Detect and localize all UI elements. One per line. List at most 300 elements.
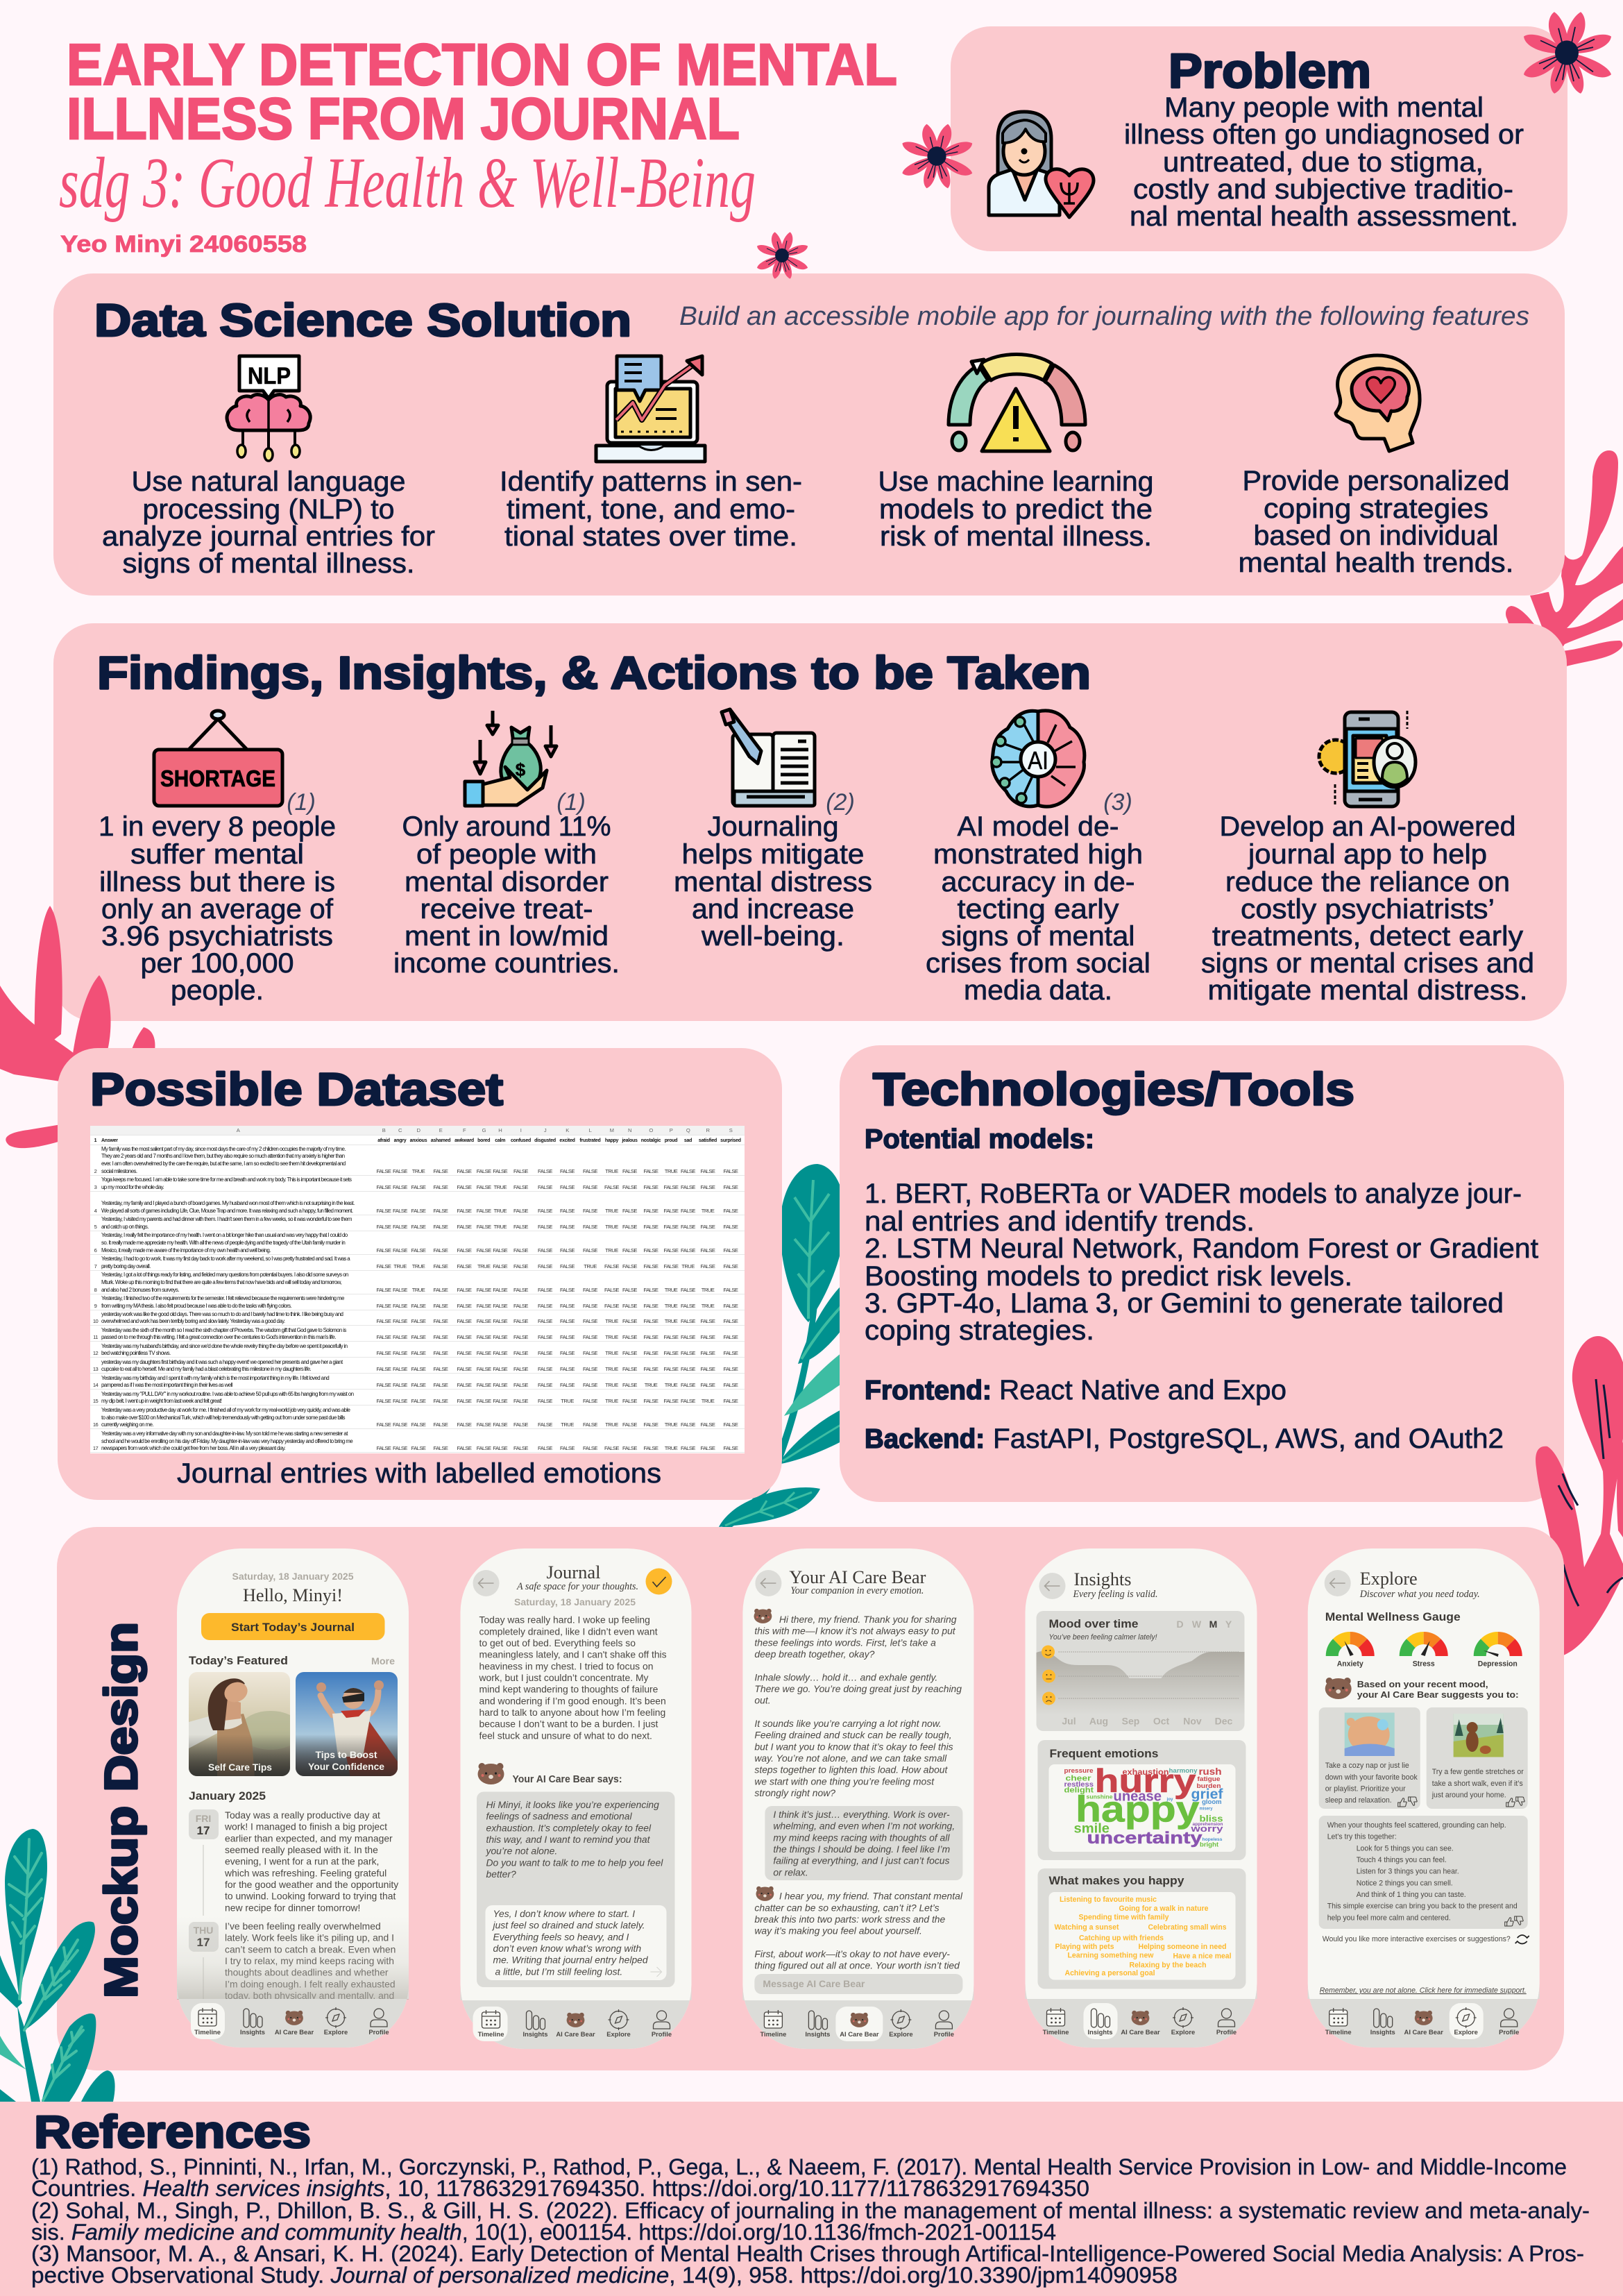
dataset table: FALSE (411, 1224, 425, 1230)
bear label: Your AI Care Bear says: (512, 1774, 622, 1785)
entry: friday: new recipe for dinner tomorrow! (225, 1902, 360, 1913)
dataset table: FALSE (583, 1421, 597, 1428)
nav bar: Explore (324, 2028, 348, 2036)
nav bar: Explore (1454, 2028, 1478, 2036)
icon: risk gauge with warning (949, 354, 1085, 451)
bear message: out. (754, 1695, 771, 1706)
heading: possible dataset: Possible Dataset (90, 1063, 503, 1115)
word cloud: frequent emotions: fatigue (1198, 1775, 1220, 1782)
dataset table: We played all sorts of games including Life, Clue, Mouse Trap and more. It was relaxing and such a happy, fun filled moment. (101, 1208, 352, 1214)
dataset table: FALSE (681, 1334, 695, 1340)
screen subtitle: Every feeling is valid. (1073, 1589, 1157, 1600)
icon: sentiment trends on laptop (596, 356, 705, 462)
user message (765, 1806, 962, 1880)
section heading: january: January 2025 (189, 1789, 266, 1803)
bear reply: First, about work—it’s okay to not have every- (754, 1948, 950, 1959)
chart: mood over time: You’ve been feeling calmer lately! (1049, 1633, 1157, 1641)
text: finding 2 (393, 811, 620, 979)
icon: NLP brain: NLP (248, 363, 291, 389)
chart: mood over time: Sep (1122, 1716, 1139, 1727)
text: finding 2: income countries. (393, 948, 620, 979)
list: what makes you happy: Helping someone in need (1138, 1943, 1227, 1951)
bear message: There we go. You’re doing great just by reaching (754, 1683, 962, 1694)
text: frontend (865, 1375, 1286, 1406)
card: nap suggestion: sleep and relaxation. (1325, 1796, 1392, 1805)
screen title: Your AI Care Bear (789, 1567, 926, 1587)
dataset table: Yesterday, I had to go to work. It was my first day back to work after my weekend, so I was pretty frustrated and sad. It was a (101, 1256, 350, 1262)
dataset table: FALSE (477, 1224, 491, 1230)
word cloud: frequent emotions: restless (1064, 1781, 1094, 1789)
entry: friday: FRI (196, 1813, 211, 1824)
text: finding 1 (99, 811, 336, 1006)
text: finding 1: people. (171, 975, 264, 1006)
bear message: we start with one thing you’re feeling most (754, 1775, 935, 1787)
dataset table: 7 (94, 1263, 96, 1269)
text: solution feature 2: timent, tone, and emo- (507, 494, 795, 525)
entry: friday: evening, I went for a run at the park, (225, 1856, 379, 1867)
text: reference 3: (3) Mansoor, M. A., & Ansari, K. H. (2024). Early Detection of Mental Health Crises through Artifical-Intelligence-Powered Social Media Analysis: A Pros- (31, 2241, 1584, 2266)
title: ILLNESS FROM JOURNAL (67, 86, 740, 151)
dataset table: FALSE (583, 1247, 597, 1253)
dataset table: and catch up on things. (101, 1224, 148, 1230)
section heading: gauge: Mental Wellness Gauge (1325, 1610, 1461, 1623)
dataset table: FALSE (622, 1224, 637, 1230)
dataset table: FALSE (622, 1445, 637, 1451)
dataset table: proud (665, 1138, 677, 1143)
text: reference 2 (31, 2198, 1590, 2245)
dataset table: FALSE (583, 1303, 597, 1309)
text: finding 3: well-being. (701, 921, 844, 952)
dataset table: newspapers from work which she could get free from her boss. All in all a very pleasant day. (101, 1445, 285, 1451)
dataset table: FALSE (457, 1398, 471, 1404)
chat box: feelings of sadness and emotional (486, 1811, 632, 1822)
panel: mockup design (57, 1527, 1564, 2070)
dataset table: TRUE (494, 1184, 507, 1190)
dataset table: FALSE (538, 1247, 552, 1253)
dataset table: FALSE (393, 1382, 407, 1388)
dataset table: FALSE (457, 1421, 471, 1428)
text: finding 4 (926, 811, 1150, 1006)
dataset table: FALSE (493, 1445, 507, 1451)
dataset table: FALSE (724, 1224, 738, 1230)
dataset table: FALSE (560, 1208, 575, 1214)
dataset table: FALSE (434, 1445, 448, 1451)
text: problem statement: Many people with mental (1164, 92, 1484, 123)
icon: head with heart in brain (1336, 355, 1420, 451)
dataset table: B (382, 1127, 385, 1133)
dataset table: FALSE (583, 1287, 597, 1293)
word cloud: frequent emotions: worry (1190, 1823, 1223, 1834)
text: reference 1: Countries. Health services insights , 10, 1178632917694350. https://doi.org/10.1177/1178632917694350 (31, 2176, 1089, 2201)
text: action: reduce the reliance on (1225, 867, 1510, 897)
dataset table: FALSE (701, 1184, 715, 1190)
dataset table: FALSE (434, 1366, 448, 1372)
word cloud: frequent emotions: gloom (1202, 1798, 1222, 1805)
dataset table: FALSE (681, 1303, 695, 1309)
dataset table: sad (684, 1138, 692, 1143)
dataset table: Yesterday, I finished two of the requirements for the semester. I felt relieved because the requirements were hindering me (101, 1295, 344, 1301)
dataset table: TRUE (393, 1263, 407, 1269)
chart: mood over time: Aug (1089, 1716, 1108, 1727)
dataset table: FALSE (457, 1366, 471, 1372)
phone: explore screen (1308, 1548, 1540, 2048)
dataset table: TRUE (665, 1287, 677, 1293)
dataset table: FALSE (644, 1334, 658, 1340)
card: grounding exercise (1319, 1816, 1528, 1929)
panel: references (0, 2102, 1623, 2296)
decoration: pink plant bottom right (1536, 1336, 1623, 1655)
dataset table: FALSE (560, 1445, 575, 1451)
dataset table: TRUE (494, 1208, 507, 1214)
dataset table: TRUE (494, 1224, 507, 1230)
dataset table: FALSE (583, 1382, 597, 1388)
dataset table: FALSE (513, 1421, 528, 1428)
suggestion heading (1357, 1679, 1519, 1700)
dataset table: FALSE (644, 1263, 658, 1269)
journal entry: work, but I just couldn’t concentrate. My (479, 1672, 649, 1683)
text: potential models: nal entries and identify trends. (865, 1206, 1255, 1237)
dataset table: 15 (93, 1398, 98, 1404)
text: solution feature 3: risk of mental illness. (880, 521, 1152, 552)
card: tips to boost confidence (296, 1672, 399, 1778)
dataset table: FALSE (377, 1382, 391, 1388)
text: reference 1 (31, 2154, 1567, 2201)
icon: AI brain: AI (1028, 746, 1048, 775)
text: action: signs or mental crises and (1201, 948, 1534, 979)
list: what makes you happy: Achieving a personal goal (1064, 1969, 1155, 1977)
text: problem statement (1124, 92, 1524, 232)
list: what makes you happy: Spending time with family (1078, 1914, 1169, 1922)
title (67, 32, 897, 151)
subtitle: sdg 3: sdg 3: Good Health & Well-Being (59, 143, 756, 223)
dataset table: FALSE (701, 1224, 715, 1230)
dataset table: FALSE (393, 1334, 407, 1340)
dataset table: 2 (94, 1168, 96, 1174)
dataset table: school and he would be enrolling on his day off Friday. My daughter-in-law was very happy yesterday and offered to bring me (101, 1438, 352, 1444)
dataset table: F (463, 1127, 466, 1133)
dataset table: FALSE (477, 1303, 491, 1309)
dataset table: FALSE (724, 1398, 738, 1404)
text: finding 2: Only around 11% (402, 811, 611, 842)
dataset table: FALSE (583, 1224, 597, 1230)
dataset table: cupcake to eat all to herself. Me and my family had a blast celebrating this milestone in my daughters life. (101, 1366, 311, 1372)
user message: or relax. (773, 1866, 808, 1877)
text: finding 2: receive treat- (420, 894, 593, 925)
phone: journal screen (461, 1548, 691, 2049)
nav bar: AI Care Bear (1404, 2028, 1443, 2036)
dataset table: FALSE (538, 1350, 552, 1356)
dataset table: FALSE (393, 1398, 407, 1404)
dataset table: FALSE (724, 1287, 738, 1293)
text: backend: FastAPI, PostgreSQL, AWS, and OAuth2 (993, 1424, 1504, 1454)
dataset table: FALSE (393, 1366, 407, 1372)
text: backend: Backend: (865, 1424, 985, 1454)
flower: centre (757, 232, 808, 279)
dataset table: FALSE (583, 1398, 597, 1404)
dataset table: disgusted (534, 1138, 556, 1143)
dataset table: 14 (93, 1382, 98, 1388)
text: solution feature 1: analyze journal entries for (102, 521, 435, 552)
text: action (1201, 811, 1534, 1006)
chat box: Everything feels so heavy, and I (493, 1931, 629, 1942)
text: finding 3 (674, 811, 872, 952)
dataset table: FALSE (681, 1445, 695, 1451)
bear message: but I want you to know that it’s okay to feel this (754, 1741, 953, 1752)
dataset table: O (649, 1127, 653, 1133)
card: self care tips: Self Care Tips (208, 1762, 272, 1773)
card: grounding exercise: Notice 2 things you can smell. (1357, 1879, 1453, 1887)
word cloud: frequent emotions: hopeless (1202, 1838, 1223, 1842)
text: frontend: React Native and Expo (999, 1375, 1286, 1406)
list: what makes you happy: Catching up with friends (1079, 1934, 1164, 1943)
dataset table: FALSE (644, 1224, 658, 1230)
dataset table: FALSE (477, 1184, 491, 1190)
dataset table: TRUE (605, 1168, 618, 1174)
dataset table: FALSE (560, 1263, 575, 1269)
chat box: exhaustion. It’s completely okay to feel (486, 1822, 652, 1833)
dataset table: FALSE (457, 1168, 471, 1174)
dataset table: social milestones. (101, 1168, 137, 1174)
dataset table: FALSE (701, 1263, 715, 1269)
text: finding 4: accuracy in de- (941, 867, 1135, 897)
phone: timeline screen (177, 1548, 409, 2048)
gauge: anxiety (1326, 1632, 1375, 1669)
dataset table: FALSE (377, 1334, 391, 1340)
icon: bear (477, 1763, 504, 1784)
dataset table: FALSE (604, 1184, 619, 1190)
dataset table: TRUE (645, 1382, 657, 1388)
text: finding 4: tecting early (958, 894, 1119, 925)
button: start journal (201, 1613, 384, 1640)
text: potential models: 2. LSTM Neural Network, Random Forest or Gradient (865, 1233, 1538, 1264)
dataset table: FALSE (583, 1366, 597, 1372)
text: problem statement: illness often go undiagnosed or (1124, 119, 1524, 150)
dataset table: FALSE (644, 1421, 658, 1428)
dataset table: FALSE (622, 1318, 637, 1324)
text: solution feature 1: processing (NLP) to (143, 494, 394, 525)
dataset table: FALSE (701, 1445, 715, 1451)
dataset table: FALSE (513, 1318, 528, 1324)
dataset table: FALSE (538, 1366, 552, 1372)
word cloud: frequent emotions: harmony (1169, 1767, 1198, 1774)
dataset table: FALSE (377, 1208, 391, 1214)
dataset table: FALSE (622, 1168, 637, 1174)
entry: friday: 17 (197, 1824, 210, 1837)
dataset table: FALSE (411, 1184, 425, 1190)
word cloud: frequent emotions: joy (1166, 1798, 1173, 1802)
dataset table: FALSE (701, 1350, 715, 1356)
dataset table: FALSE (681, 1398, 695, 1404)
dataset table: FALSE (701, 1318, 715, 1324)
dataset table: satisfied (699, 1138, 717, 1143)
list: what makes you happy: Going for a walk in nature (1119, 1905, 1209, 1913)
card: tips to boost confidence: Tips to Boost (315, 1749, 377, 1760)
bear reply: thing figured out all at once. Your worth isn’t tied (754, 1960, 960, 1971)
text: action: mitigate mental distress. (1207, 975, 1528, 1006)
suggestion heading: your AI Care Bear suggests you to: (1357, 1689, 1519, 1700)
journal entry: and wondering if I’m good enough. It’s been (479, 1695, 666, 1706)
dataset table: E (439, 1127, 442, 1133)
dataset table: 3 (94, 1184, 96, 1190)
user message: failing at everything, and I just can’t focus (773, 1855, 949, 1866)
dataset table: FALSE (644, 1398, 658, 1404)
bear message: Inhale slowly… hold it… and exhale gently. (754, 1671, 937, 1682)
chat box: you’re not alone. (486, 1846, 557, 1857)
text: solution feature 4: coping strategies (1264, 493, 1488, 524)
screen title: Explore (1360, 1569, 1418, 1589)
dataset table: G (482, 1127, 486, 1133)
dataset table: FALSE (377, 1184, 391, 1190)
phone: AI care bear screen (742, 1548, 974, 2049)
dataset table: bored (477, 1138, 490, 1143)
dataset table: FALSE (538, 1334, 552, 1340)
card: tips to boost confidence: Your Confidence (308, 1761, 384, 1772)
dataset table: Mexico, it really made me aware of the importance of my own health and well being. (101, 1247, 271, 1253)
dataset table: 1 (94, 1138, 96, 1143)
word cloud: frequent emotions: bright (1200, 1841, 1218, 1848)
dataset table: FALSE (513, 1445, 528, 1451)
dataset table: FALSE (434, 1398, 448, 1404)
text: reference 3 (31, 2241, 1584, 2288)
dataset table: TRUE (605, 1208, 618, 1214)
dataset table: FALSE (622, 1247, 637, 1253)
gauge: anxiety: Anxiety (1337, 1660, 1364, 1669)
dataset table: FALSE (538, 1421, 552, 1428)
dataset table: FALSE (604, 1263, 619, 1269)
entry: friday: which was refreshing. Feeling grateful (224, 1867, 386, 1878)
dataset table: 12 (93, 1350, 98, 1356)
entry: thursday: I’m doing enough. I felt really exhausted (225, 1978, 396, 1989)
dataset table: FALSE (434, 1263, 448, 1269)
nav bar: AI Care Bear (556, 2030, 595, 2038)
dataset table: FALSE (622, 1184, 637, 1190)
text: solution tagline: Build an accessible mobile app for journaling with the following features (679, 302, 1529, 331)
dataset table: FALSE (477, 1168, 491, 1174)
card: grounding exercise: And think of 1 thing you can taste. (1357, 1891, 1466, 1899)
card: stretch suggestion: Try a few gentle stretches or (1432, 1768, 1524, 1776)
dataset table: TRUE (605, 1334, 618, 1340)
dataset table: FALSE (583, 1445, 597, 1451)
nav bar: Insights (523, 2030, 547, 2038)
screen title: Journal (547, 1562, 601, 1582)
dataset table: FALSE (513, 1247, 528, 1253)
journal entry: because I don’t want to be a burden. I just (479, 1719, 658, 1730)
dataset table: TRUE (412, 1168, 425, 1174)
dataset table: FALSE (538, 1184, 552, 1190)
text: finding 2: ment in low/mid (405, 921, 609, 952)
dataset table: FALSE (724, 1184, 738, 1190)
text: finding 3: and increase (692, 894, 854, 925)
dataset table: FALSE (411, 1303, 425, 1309)
citation (1): (1) (287, 789, 316, 816)
dataset table: FALSE (664, 1208, 678, 1214)
nav bar (1026, 1984, 1257, 2048)
dataset table: FALSE (434, 1382, 448, 1388)
nav bar: Insights (1370, 2028, 1395, 2036)
dataset table: FALSE (724, 1318, 738, 1324)
dataset table: A (237, 1127, 239, 1133)
panel: technologies (840, 1045, 1564, 1502)
word cloud: frequent emotions: delight (1064, 1787, 1094, 1795)
message input: Message AI Care Bear (763, 1978, 865, 1989)
text: action: treatments, detect early (1212, 921, 1523, 952)
dataset table: FALSE (434, 1303, 448, 1309)
dataset table: FALSE (644, 1350, 658, 1356)
word cloud: frequent emotions: misery (1199, 1807, 1213, 1812)
dataset table: TRUE (605, 1318, 618, 1324)
chat box: Do you want to talk to me to help you feel (486, 1857, 663, 1868)
dataset table: FALSE (493, 1287, 507, 1293)
dataset table: FALSE (622, 1382, 637, 1388)
journal entry: to get out of bed. Everything feels so (479, 1637, 636, 1648)
icon: AI brain (992, 711, 1085, 807)
dataset table: excited (559, 1138, 575, 1143)
dataset table: calm (495, 1138, 505, 1143)
dataset table: FALSE (560, 1318, 575, 1324)
nav bar: Profile (1216, 2028, 1237, 2036)
dataset table: FALSE (604, 1303, 619, 1309)
dataset table: FALSE (393, 1287, 407, 1293)
text: frontend: Frontend: (865, 1376, 992, 1406)
dataset table: FALSE (411, 1208, 425, 1214)
screen subtitle: Your companion in every emotion. (790, 1585, 924, 1596)
dataset table: FALSE (664, 1334, 678, 1340)
bear reply: way it’s making you feel about yourself. (754, 1925, 922, 1936)
back button (1039, 1573, 1066, 1599)
panel: findings (53, 623, 1567, 1021)
text: finding 1: 3.96 psychiatrists (101, 921, 333, 952)
icon: NLP brain (227, 356, 310, 461)
text: potential models: 1. BERT, RoBERTa or VADER models to analyze jour- (865, 1179, 1522, 1209)
dataset table: D (417, 1127, 420, 1133)
dataset table: FALSE (560, 1184, 575, 1190)
chart: mood over time: Nov (1183, 1716, 1202, 1727)
dataset table: Yesterday was a very productive day at work for me. I finished all of my work for my real-world job very quickly, and was able (101, 1407, 350, 1413)
dataset table: FALSE (664, 1184, 678, 1190)
nav bar: Timeline (1325, 2028, 1352, 2036)
card: stretch suggestion (1427, 1707, 1528, 1809)
icon: money in hand with falling arrows (465, 711, 556, 806)
chart: mood over time: Dec (1215, 1716, 1233, 1727)
heading: technologies: Technologies/Tools (873, 1063, 1354, 1115)
dataset table: FALSE (538, 1303, 552, 1309)
entry: thursday: thoughts about deadlines and whether (225, 1967, 389, 1978)
text: solution feature 3 (878, 466, 1153, 552)
dataset table: FALSE (622, 1421, 637, 1428)
text: problem statement: untreated, due to stigma, (1163, 147, 1484, 178)
dataset table: FALSE (513, 1224, 528, 1230)
dataset table: TRUE (561, 1421, 574, 1428)
dataset table: FALSE (681, 1350, 695, 1356)
icon: bear (1325, 1678, 1352, 1699)
dataset table: FALSE (393, 1224, 407, 1230)
citation (2): (2) (826, 789, 855, 816)
dataset table: TRUE (477, 1263, 490, 1269)
dataset table: FALSE (411, 1382, 425, 1388)
dataset table: FALSE (538, 1263, 552, 1269)
card: grounding exercise: help you feel more calm and centered. (1327, 1914, 1451, 1922)
dataset table: FALSE (377, 1303, 391, 1309)
chart: mood over time: M (1209, 1619, 1217, 1630)
card: nap suggestion: Take a cozy nap or just lie (1325, 1762, 1409, 1770)
dataset table: FALSE (411, 1350, 425, 1356)
dataset table: FALSE (457, 1287, 471, 1293)
chart: mood over time: Jul (1062, 1716, 1076, 1727)
text: finding 3: helps mitigate (681, 839, 865, 870)
text: more suggestions prompt: Would you like more interactive exercises or suggestions? (1323, 1935, 1511, 1943)
text: finding 3: Journaling (708, 811, 838, 842)
icon: shortage sign: SHORTAGE (160, 766, 275, 791)
